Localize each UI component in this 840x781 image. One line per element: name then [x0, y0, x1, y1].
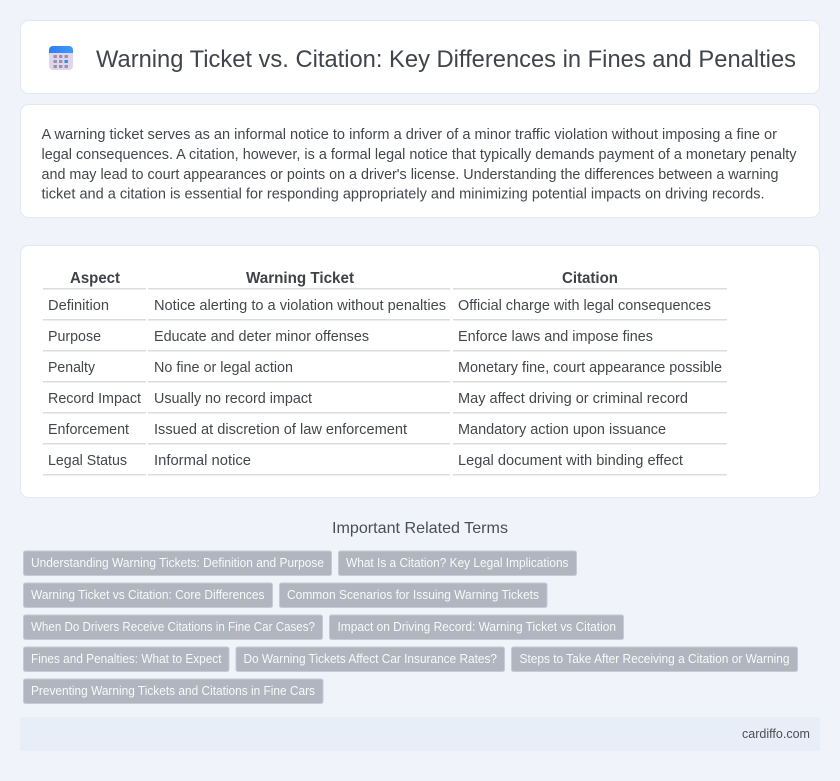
table row: purpose: Enforce laws and impose fines [458, 329, 653, 345]
table row: record impact [43, 391, 727, 414]
table row: record impact: May affect driving or criminal record [458, 391, 688, 407]
tag [338, 551, 576, 576]
table row: definition: Definition [48, 298, 109, 314]
text block: intro: and may lead to court appearances or points on a driver's license. Understanding the differences between a warning [42, 167, 778, 183]
tag: Understanding Warning Tickets: Definition and Purpose [31, 556, 324, 570]
table row: enforcement: Mandatory action upon issuance [458, 422, 666, 438]
text block: intro: legal consequences. A citation, however, is a formal legal notice that typically demands payment of a monetary penalty [42, 147, 797, 163]
tag: Impact on Driving Record: Warning Ticket vs Citation [338, 620, 616, 634]
table row: penalty: No fine or legal action [154, 360, 293, 376]
tag: When Do Drivers Receive Citations in Fine Car Cases? [31, 620, 315, 634]
tag: What Is a Citation? Key Legal Implications [346, 556, 568, 570]
panel: intro paragraph [20, 104, 820, 218]
table row: purpose [43, 329, 727, 352]
table row: legal status: Informal notice [154, 453, 251, 469]
tag: Steps to Take After Receiving a Citation or Warning [520, 652, 790, 666]
related terms tags [24, 551, 798, 704]
table row: purpose: Purpose [48, 329, 101, 345]
table header [43, 270, 727, 290]
text block: intro [42, 127, 797, 202]
tag [24, 647, 229, 672]
panel: header [20, 20, 820, 94]
table row: legal status: Legal document with binding effect [458, 453, 683, 469]
table row: penalty [43, 360, 727, 382]
tag: Common Scenarios for Issuing Warning Tickets [287, 588, 539, 602]
heading: related terms: Important Related Terms [332, 520, 508, 537]
table header: Citation [562, 270, 618, 287]
tag: Do Warning Tickets Affect Car Insurance Rates? [244, 652, 497, 666]
tag [236, 647, 504, 672]
footer text: cardiffo.com [742, 727, 810, 741]
text block: intro: A warning ticket serves as an informal notice to inform a driver of a minor traffic violation without imposing a fine or [42, 127, 777, 143]
text block: intro: ticket and a citation is essential for responding appropriately and minimizing potential impacts on driving records. [42, 186, 764, 202]
table row: legal status: Legal Status [48, 453, 127, 469]
table header: Aspect [70, 270, 121, 287]
table row: record impact: Usually no record impact [154, 391, 312, 407]
table row: record impact: Record Impact [48, 391, 141, 407]
table row: definition: Notice alerting to a violation without penalties [154, 298, 446, 314]
table row: enforcement: Issued at discretion of law enforcement [154, 422, 407, 438]
table header: Warning Ticket [246, 270, 355, 287]
tag [280, 583, 547, 608]
tag: Warning Ticket vs Citation: Core Differences [31, 588, 264, 602]
tag [24, 583, 272, 608]
table row: legal status [43, 453, 727, 476]
tag [512, 647, 798, 672]
table row: definition [43, 298, 727, 320]
footer [20, 717, 820, 751]
table row: definition: Official charge with legal consequences [458, 298, 711, 314]
tag [330, 615, 624, 640]
table row: enforcement [43, 422, 727, 444]
tag: Preventing Warning Tickets and Citations in Fine Cars [31, 684, 315, 698]
tag [24, 551, 332, 576]
title: Warning Ticket vs. Citation: Key Differences in Fines and Penalties [96, 46, 796, 73]
icon: calendar [49, 46, 73, 70]
table row: penalty: Penalty [48, 360, 96, 376]
tag [24, 679, 323, 704]
table row: penalty: Monetary fine, court appearance possible [458, 360, 722, 376]
table row: enforcement: Enforcement [48, 422, 129, 438]
panel: comparison table [20, 246, 820, 498]
tag: Fines and Penalties: What to Expect [31, 652, 222, 666]
tag [24, 615, 322, 640]
table row: purpose: Educate and deter minor offenses [154, 329, 369, 345]
